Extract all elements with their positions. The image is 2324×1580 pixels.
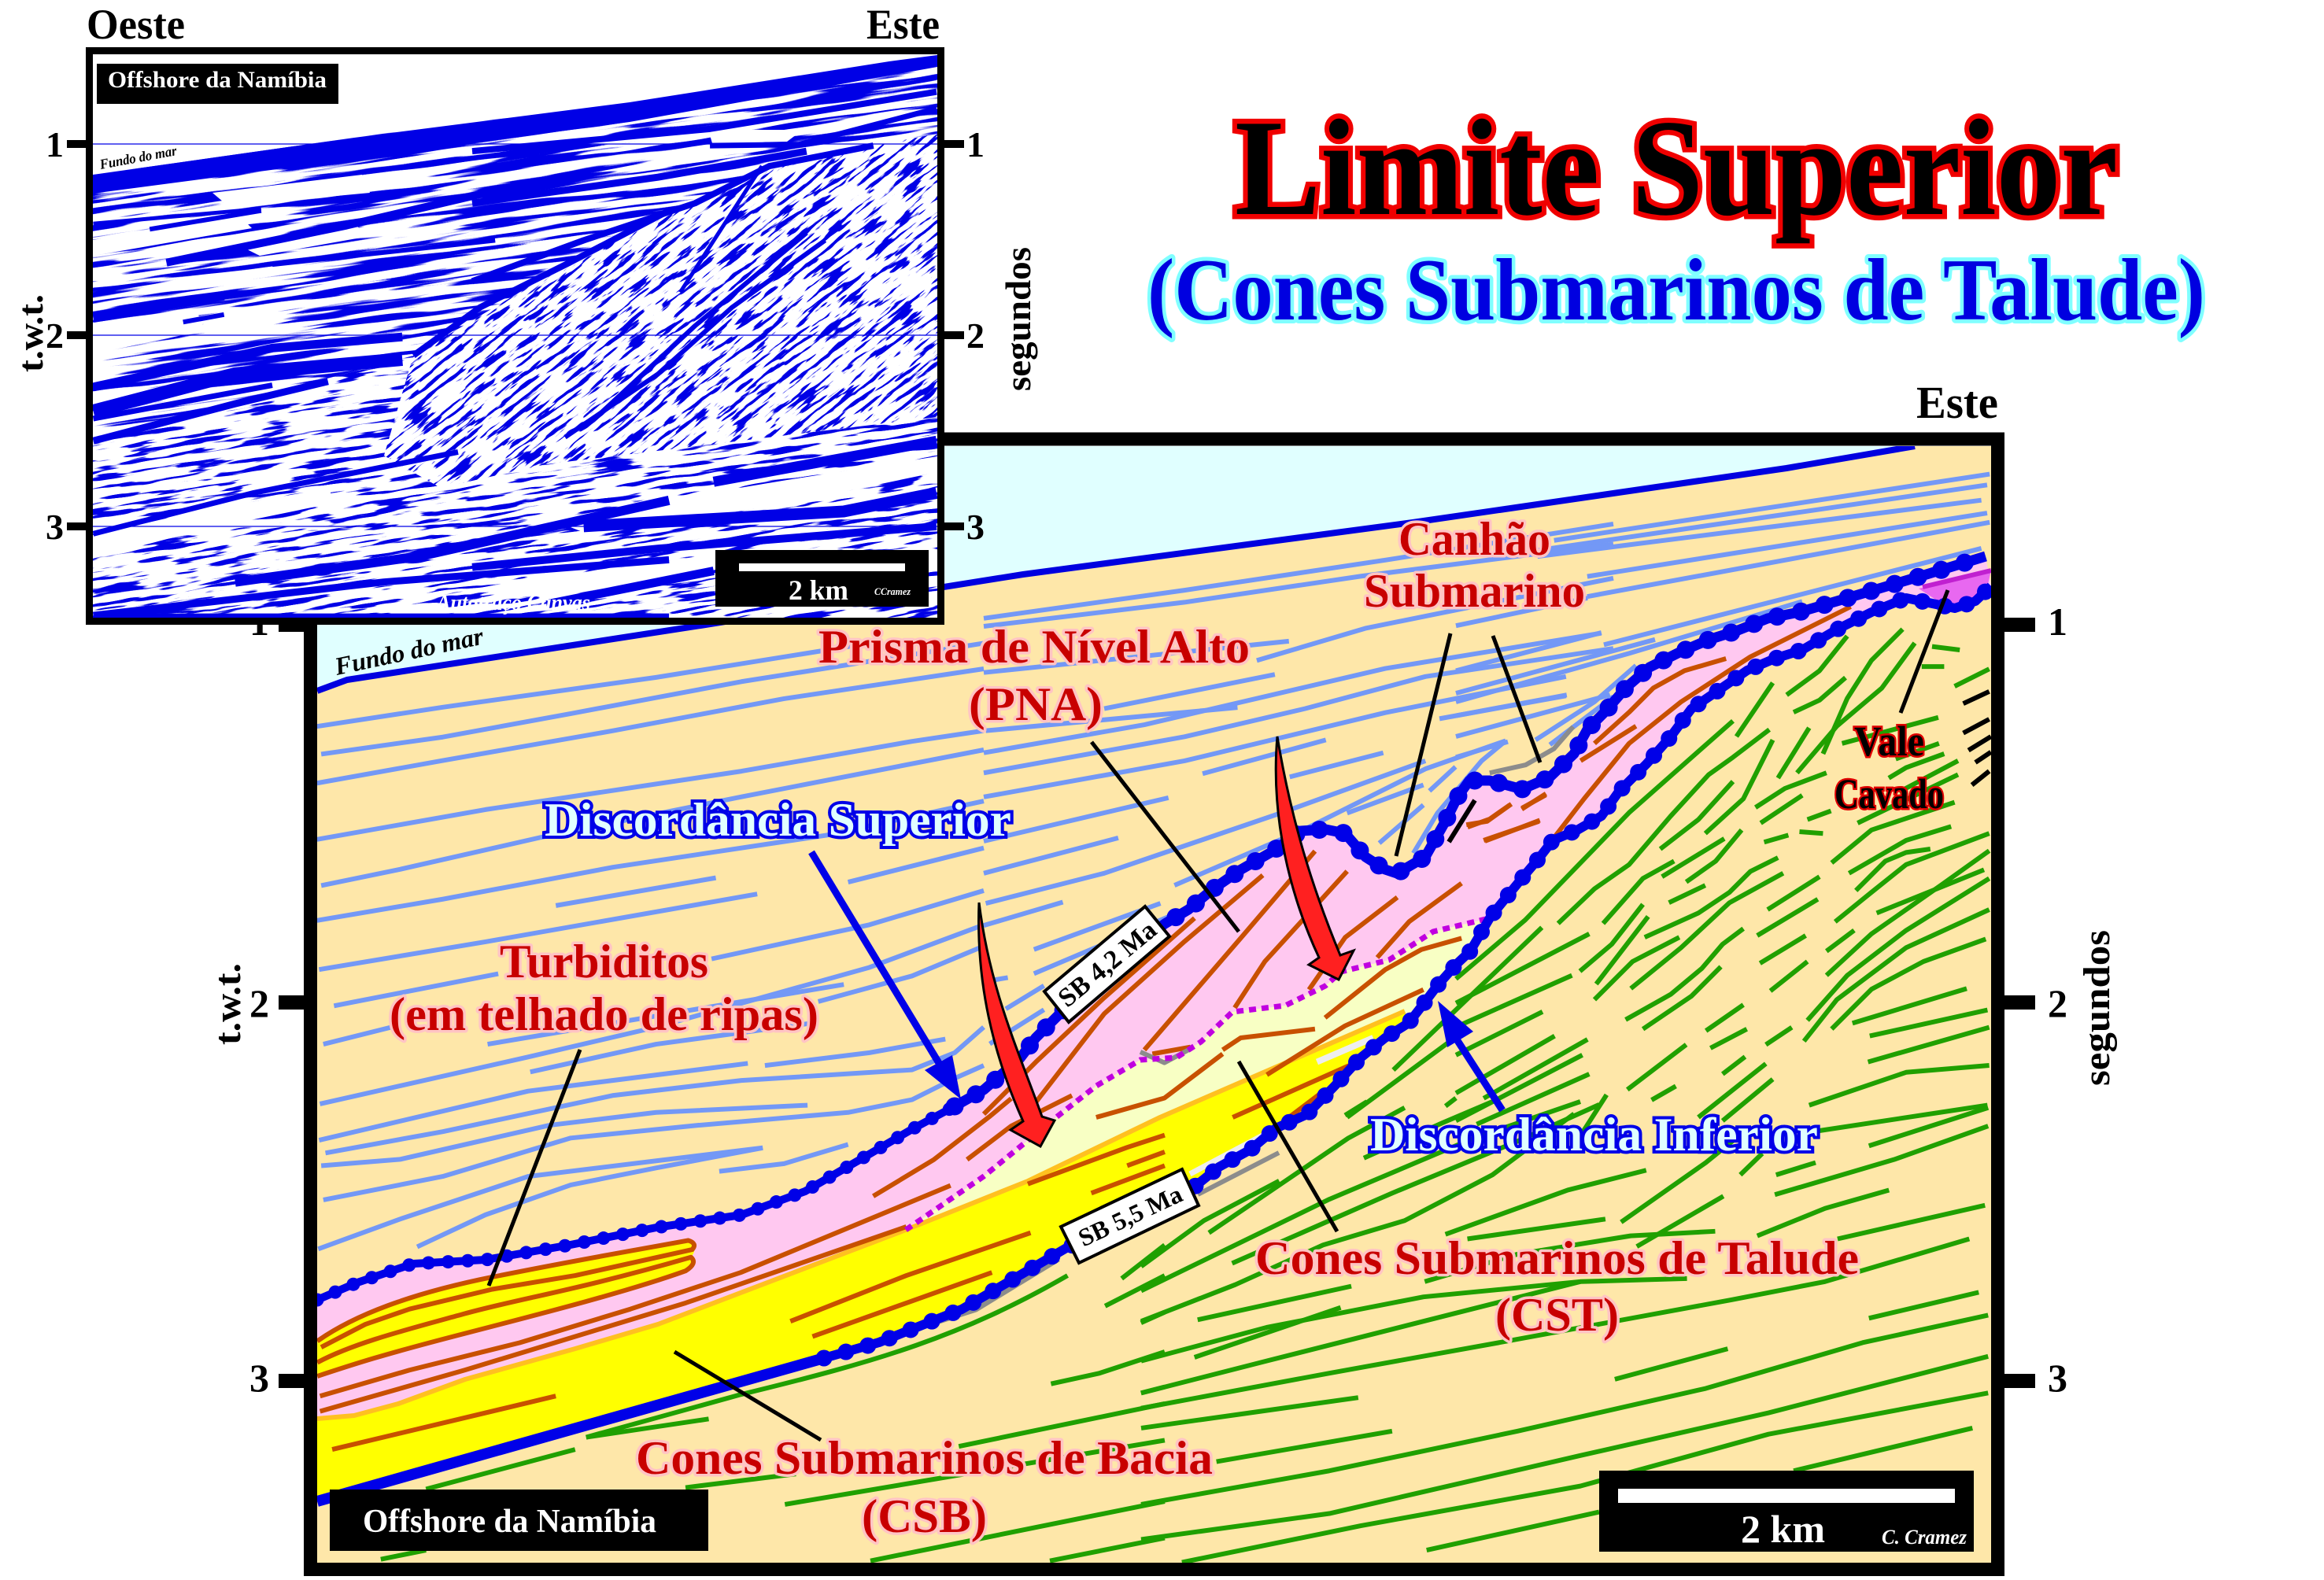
location box: Offshore da Namíbia: Offshore da Namíbia (363, 1504, 656, 1540)
turbidite lobes and basin reflectors (317, 1095, 1165, 1449)
label: Canhão Submarino: Submarino (1364, 565, 1585, 617)
label: Vale Cavado: Vale (1854, 718, 1924, 765)
label: Prisma de Nível Alto (PNA): Prisma de Nível Alto (818, 621, 1250, 673)
tag: SB 5,5 Ma (1061, 1169, 1199, 1263)
axis title: segundos: segundos (2076, 930, 2118, 1086)
bedding lines: green substrate, shelf side (1456, 629, 1990, 1141)
internal reflectors of prism and fans (984, 795, 1546, 1117)
location box: Offshore da Namíbia (330, 1490, 708, 1551)
bedding lines: central slope strata (984, 524, 1613, 1044)
section frame (310, 439, 1997, 1569)
panel: seismic line autotrace (0, 0, 1437, 1191)
sequence body: basin fans (yellow) (317, 1011, 1409, 1501)
scale bar: 2 km (1599, 1471, 1974, 1552)
heading: Este: Este (866, 1, 940, 48)
location box: Offshore da Namíbia: Offshore da Namíbia (108, 67, 327, 93)
sequence body: highstand prism (pink) (317, 556, 1991, 1501)
label: Discordância Inferior: Discordância Inferior (1370, 1109, 1818, 1161)
label: Cones Submarinos de Talude (CST) (1255, 1232, 1859, 1341)
red arrow: upper onlap trend, right (1276, 736, 1354, 980)
major seismic reflectors, west half (93, 185, 669, 617)
blue arrow: upper unconformity (811, 852, 961, 1099)
pale strip inside basin fan (1190, 1133, 1267, 1174)
red arrow: upper onlap trend, left (979, 903, 1055, 1146)
time axis numbers, inset: 1 (46, 124, 64, 164)
time axis numbers, section: 1 (249, 600, 269, 644)
label: Cones Submarinos de Talude (CST): (CST) (1495, 1289, 1619, 1341)
tag: SB 4,2 Ma: SB 4,2 Ma (1053, 915, 1162, 1013)
time axis ticks, inset (67, 140, 964, 530)
heading: Este, section: Este (1916, 377, 1998, 428)
time axis numbers, section: 2 (2048, 981, 2067, 1025)
label: Canhão Submarino (1364, 513, 1585, 617)
time axis numbers, inset: 3 (966, 507, 985, 547)
axis title: t.w.t.: t.w.t. (10, 294, 50, 372)
bedding lines: upper right strata (1538, 474, 1990, 644)
label: Prisma de Nível Alto (PNA) (818, 621, 1250, 730)
white lenses between reflectors (93, 130, 937, 598)
time axis numbers, section (249, 600, 2067, 1400)
title: Limite Superior (1235, 91, 2118, 244)
label: Cones Submarinos de Talude (CST): Cones Submarinos de Talude (1255, 1232, 1859, 1284)
time axis numbers, section: 3 (2048, 1356, 2067, 1400)
label: Vale Cavado (1834, 718, 1944, 818)
label: Fundo do mar: Fundo do mar (331, 622, 486, 681)
axis title: segundos: segundos (998, 247, 1038, 391)
location box: Offshore da Namíbia (97, 64, 338, 104)
upper unconformity (scalloped blue surface) (317, 556, 1986, 1300)
bedding lines: canyon head strata (1456, 598, 1802, 757)
hatch marks at valley flank (1964, 692, 1991, 785)
time axis numbers, inset: 2 (966, 316, 985, 356)
time axis ticks, section (279, 618, 2035, 1388)
canyon reflectors over fill (1466, 794, 1546, 840)
bedding lines: left slope strata (317, 643, 984, 1249)
time axis numbers, section: 3 (249, 1356, 269, 1400)
scale bar: 2 km: CCramez (874, 585, 911, 597)
label: Fundo do mar: Fundo do mar (98, 142, 179, 172)
panel: interpreted geological section (207, 377, 2118, 1569)
valley axis line (1923, 570, 1991, 587)
label: Vale Cavado: Cavado (1834, 770, 1944, 818)
grey strip near SB 5,5 (1198, 1153, 1279, 1194)
time axis numbers, section: 1 (2048, 600, 2067, 644)
heading: Oeste: Oeste (87, 1, 185, 48)
basin fan top boundary (317, 1011, 1405, 1419)
lower unconformity (smooth then scalloped blue surface) (317, 586, 1991, 1501)
label: Discordância Superior: Discordância Superior (545, 794, 1011, 846)
sequence body: slope fans (pale yellow) (914, 921, 1481, 1224)
grey basal strip (874, 1261, 1060, 1339)
valley fill tip (1919, 573, 1991, 604)
blue arrow: lower unconformity (1438, 1001, 1502, 1110)
tag: SB 5,5 Ma: SB 5,5 Ma (1073, 1179, 1187, 1252)
inset frame (90, 50, 941, 622)
subtitle: (Cones Submarinos de Talude) (1147, 242, 2205, 339)
scale bar: 2 km (715, 550, 929, 607)
time axis numbers, section: 2 (249, 981, 269, 1025)
reflectors near shelf edge (1554, 607, 1851, 837)
time axis numbers, inset: 2 (46, 316, 64, 356)
seafloor line (317, 446, 1915, 691)
section background and sea (317, 446, 1991, 1563)
grey reflector details (1140, 727, 1573, 1063)
seafloor band (93, 55, 937, 194)
label: Turbiditos (em telhado de ripas): Turbiditos (500, 936, 708, 988)
label: Turbiditos (em telhado de ripas) (390, 936, 818, 1040)
label: Cones Submarinos de Bacia (CSB): (CSB) (862, 1490, 987, 1542)
major seismic reflectors, east half (472, 92, 937, 604)
leader lines (489, 590, 1948, 1440)
time axis numbers, inset: 1 (966, 124, 985, 164)
faint time grid lines (93, 144, 937, 526)
bedding lines: green substrate lower left (381, 1245, 1165, 1561)
label: Prisma de Nível Alto (PNA): (PNA) (969, 678, 1103, 730)
label: Turbiditos (em telhado de ripas): (em telhado de ripas) (390, 988, 818, 1040)
scale bar: 2 km: C. Cramez (1882, 1526, 1967, 1549)
seismic image background and texture (0, 0, 1437, 1191)
bedding lines: green substrate, basin side (1141, 1102, 1988, 1563)
label: Cones Submarinos de Bacia (CSB) (636, 1432, 1213, 1542)
time axis numbers, inset (46, 124, 985, 547)
bedding lines: green substrate, below slope (1347, 928, 1542, 1117)
axis title: t.w.t.: t.w.t. (207, 963, 249, 1045)
label: Canhão Submarino: Canhão (1398, 513, 1550, 565)
label: Autotraço Cânvas: Autotraço Cânvas (435, 591, 590, 615)
time axis numbers, inset: 3 (46, 507, 64, 547)
label: Cones Submarinos de Bacia (CSB): Cones Submarinos de Bacia (636, 1432, 1213, 1484)
scale bar: 2 km: 2 km (1741, 1507, 1825, 1551)
dashed surface between slope fans and prism (906, 919, 1486, 1230)
scale bar: 2 km: 2 km (789, 574, 848, 606)
